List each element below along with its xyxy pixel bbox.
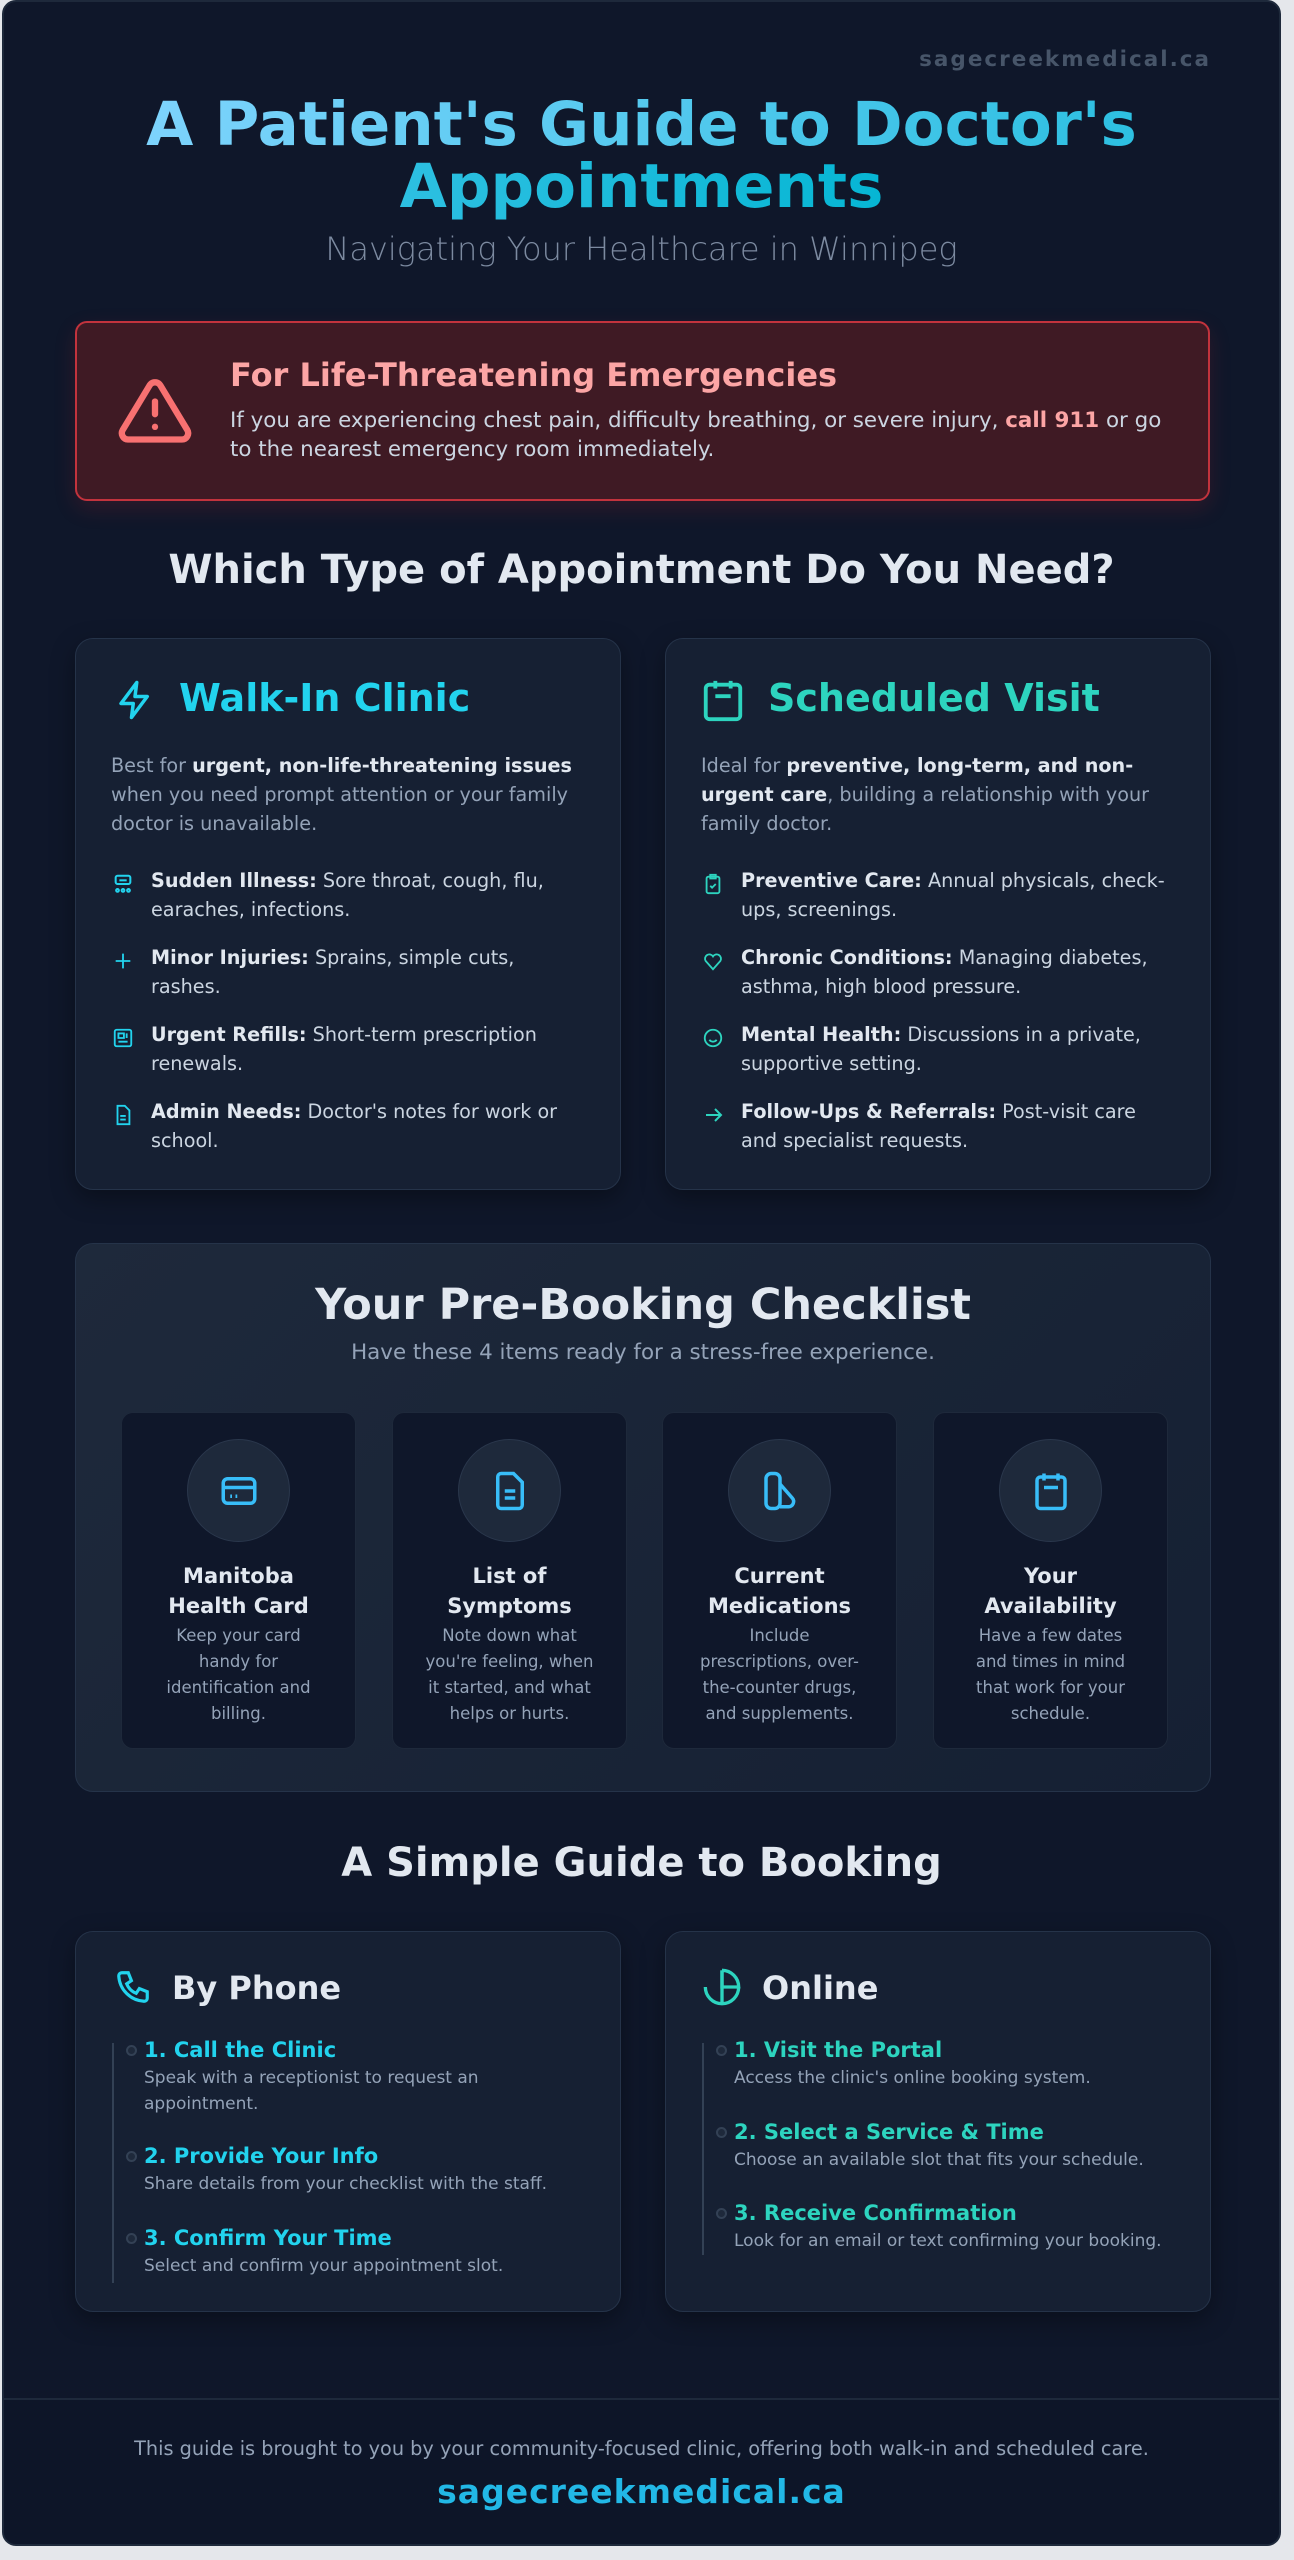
item: chronic conditions <box>704 946 1148 998</box>
item: mental health <box>704 1023 1141 1075</box>
heading: scheduled: Scheduled Visit <box>768 676 1100 720</box>
icon: pills <box>728 1439 831 1542</box>
heading: which type: Which Type of Appointment Do You Need? <box>168 547 1115 593</box>
card: health card: Keep your card handy for identification and billing. <box>166 1626 311 1723</box>
icon: warning triangle <box>118 379 192 443</box>
icon: phone <box>117 1971 149 2003</box>
panel: scheduled visit <box>665 638 1211 1190</box>
card: medications <box>662 1412 897 1749</box>
card: availability: Your <box>1024 1564 1077 1588</box>
step: receive confirmation <box>716 2201 1162 2251</box>
card: availability <box>933 1412 1168 1749</box>
list: walk-in reasons: Admin Needs: Doctor's notes for work or school. <box>151 1100 557 1152</box>
heading: emergency: For Life-Threatening Emergencies <box>230 356 837 394</box>
heading: booking guide: A Simple Guide to Booking <box>341 1840 942 1886</box>
list: scheduled reasons: Preventive Care: Annual physicals, check-ups, screenings. <box>741 869 1165 921</box>
footer domain: sagecreekmedical.ca <box>437 2472 846 2511</box>
top domain: sagecreekmedical.ca <box>919 47 1211 72</box>
card: health card: Manitoba <box>183 1564 294 1588</box>
icon: globe <box>704 1968 740 2006</box>
timeline: online steps: 3. Receive Confirmation <box>734 2201 1017 2225</box>
icon: calendar <box>704 680 742 722</box>
panel: by phone <box>75 1931 621 2312</box>
icon: calendar <box>999 1439 1102 1542</box>
card: medications: Include prescriptions, over-the-counter drugs, and supplements. <box>700 1626 859 1723</box>
list: walk-in reasons: Sudden Illness: Sore throat, cough, flu, earaches, infections. <box>151 869 544 921</box>
icon: document <box>458 1439 561 1542</box>
text: walk-in description: Best for urgent, non-life-threatening issues when you need prompt attention or your family doctor is unavailable. <box>111 754 572 835</box>
title: Appointments <box>400 151 883 222</box>
step: select service <box>716 2120 1144 2170</box>
timeline: online steps: Access the clinic's online booking system. <box>734 2068 1091 2088</box>
title <box>146 89 1137 222</box>
card: availability: Have a few dates and times in mind that work for your schedule. <box>976 1626 1125 1723</box>
card: symptoms: Symptoms <box>447 1594 572 1618</box>
subtitle: Navigating Your Healthcare in Winnipeg <box>325 230 958 268</box>
timeline: phone steps: Share details from your checklist with the staff. <box>144 2174 547 2194</box>
list: scheduled reasons: Chronic Conditions: Managing diabetes, asthma, high blood pressure. <box>741 946 1148 998</box>
timeline: online steps <box>702 2038 1162 2255</box>
list: walk-in reasons: Minor Injuries: Sprains, simple cuts, rashes. <box>151 946 514 998</box>
step: confirm time <box>126 2226 503 2276</box>
card: availability: Availability <box>984 1594 1117 1618</box>
timeline: phone steps: 1. Call the Clinic <box>144 2038 336 2062</box>
icon: card <box>187 1439 290 1542</box>
card: medications: Current <box>734 1564 825 1588</box>
panel: emergency alert <box>75 321 1210 501</box>
heading: checklist: Your Pre-Booking Checklist <box>315 1280 971 1330</box>
list: scheduled reasons: Follow-Ups & Referrals: Post-visit care and specialist requests. <box>741 1100 1136 1152</box>
step: visit portal <box>716 2038 1091 2088</box>
item: admin needs <box>116 1100 557 1152</box>
timeline: online steps: 1. Visit the Portal <box>734 2038 942 2062</box>
text: footer note: This guide is brought to you by your community-focused clinic, offering both walk-in and scheduled care. <box>134 2437 1149 2460</box>
heading: walk-in: Walk-In Clinic <box>179 676 470 720</box>
item: urgent refills <box>114 1023 537 1075</box>
card: health card <box>121 1412 356 1749</box>
card: symptoms: Note down what you're feeling, when it started, and what helps or hurts. <box>426 1626 593 1723</box>
card: health card: Health Card <box>168 1594 309 1618</box>
list: scheduled reasons <box>704 869 1165 1152</box>
timeline: phone steps: Select and confirm your appointment slot. <box>144 2256 503 2276</box>
item: minor injuries <box>116 946 514 998</box>
list: walk-in reasons <box>114 869 557 1152</box>
panel: pre-booking checklist <box>75 1243 1211 1792</box>
item: follow-ups <box>706 1100 1136 1152</box>
heading: by phone: By Phone <box>172 1969 341 2007</box>
card: symptoms: List of <box>472 1564 546 1588</box>
text: emergency body: If you are experiencing chest pain, difficulty breathing, or severe injury, call 911 or go to the nearest emergency room immediately. <box>230 408 1161 462</box>
list: walk-in reasons: Urgent Refills: Short-term prescription renewals. <box>151 1023 537 1075</box>
item: sudden illness <box>114 869 544 921</box>
panel: walk-in clinic <box>75 638 621 1190</box>
timeline: online steps: Look for an email or text confirming your booking. <box>734 2231 1162 2251</box>
timeline: phone steps: 2. Provide Your Info <box>144 2144 378 2168</box>
list: scheduled reasons: Mental Health: Discussions in a private, supportive setting. <box>741 1023 1141 1075</box>
timeline: phone steps: 3. Confirm Your Time <box>144 2226 392 2250</box>
timeline: phone steps: Speak with a receptionist to request an appointment. <box>144 2068 479 2114</box>
text: scheduled description: Ideal for preventive, long-term, and non-urgent care, building a relationship with your family doctor. <box>701 754 1149 835</box>
timeline: phone steps <box>112 2038 547 2283</box>
timeline: online steps: Choose an available slot that fits your schedule. <box>734 2150 1144 2170</box>
timeline: online steps: 2. Select a Service & Time <box>734 2120 1044 2144</box>
title: A Patient's Guide to Doctor's <box>146 89 1137 160</box>
step: provide info <box>126 2144 547 2194</box>
card: symptoms <box>392 1412 627 1749</box>
item: preventive care <box>706 869 1165 921</box>
panel: online <box>665 1931 1211 2312</box>
heading: online: Online <box>762 1969 878 2007</box>
card: medications: Medications <box>708 1594 851 1618</box>
footer <box>4 2398 1279 2548</box>
icon: lightning <box>119 680 150 720</box>
step: call the clinic <box>126 2038 479 2114</box>
text: checklist subtitle: Have these 4 items ready for a stress-free experience. <box>351 1340 935 1365</box>
